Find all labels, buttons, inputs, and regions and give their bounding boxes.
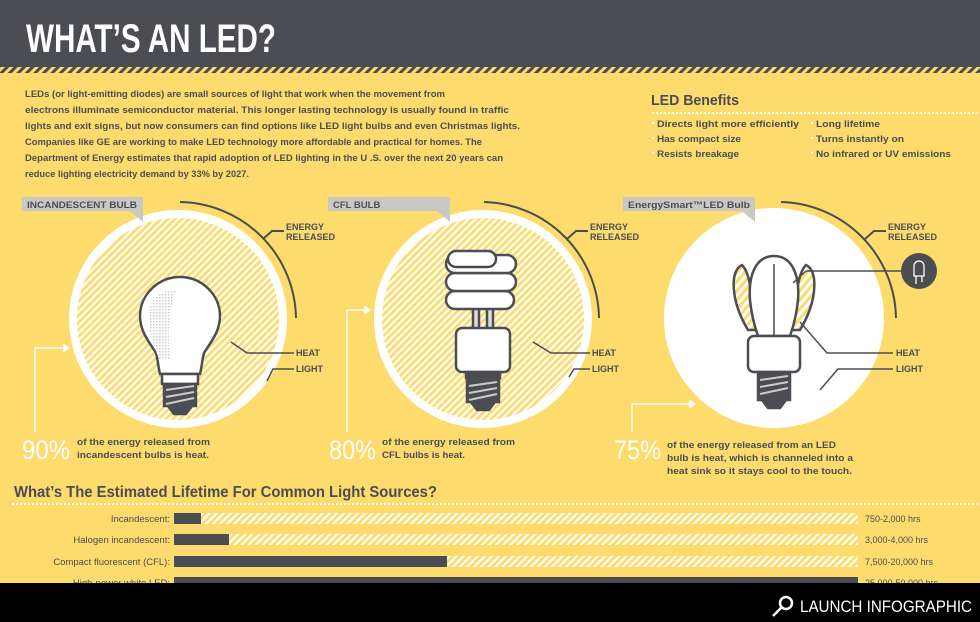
stat 90%: 90% xyxy=(22,435,70,465)
intro text: reduce lighting electricity demand by 33% by 2027. xyxy=(25,169,249,179)
panel: LED: EnergySmart™LED Bulb xyxy=(628,200,750,211)
bar chart: lifetimes: 3,000-4,000 hrs xyxy=(865,535,929,545)
panel: LED benefits: Has compact size xyxy=(657,134,741,144)
panel: CFL: CFL bulbs is heat. xyxy=(382,450,465,460)
bar chart: lifetimes: What’s The Estimated Lifetime For Common Light Sources? xyxy=(14,484,437,501)
icon: LED diode xyxy=(901,253,937,289)
intro text: LEDs (or light-emitting diodes) are small sources of light that work when the movement from xyxy=(25,89,445,99)
bar chart: lifetimes: 25,000-50,000 hrs xyxy=(865,578,939,588)
panel: LED benefits: Turns instantly on xyxy=(816,134,904,144)
panel: LED: RELEASED xyxy=(888,232,938,242)
panel: LED benefits: No infrared or UV emissions xyxy=(816,149,951,159)
label tag: INCANDESCENT BULB xyxy=(27,200,137,211)
panel: LED: bulb is heat, which is channeled into a xyxy=(667,453,854,463)
panel: CFL xyxy=(328,197,640,465)
panel: CFL: of the energy released from xyxy=(382,437,515,447)
bar chart: lifetimes xyxy=(12,484,980,589)
panel: CFL: HEAT xyxy=(592,348,616,358)
panel: LED xyxy=(614,197,938,476)
panel: LED: ENERGY xyxy=(888,222,926,232)
panel: incandescent: ENERGY xyxy=(286,222,324,232)
icon: magnifier xyxy=(773,597,792,616)
bar chart: lifetimes: Incandescent: xyxy=(111,514,170,525)
panel: CFL: 80% xyxy=(329,435,376,465)
icon: CFL bulb xyxy=(446,251,516,410)
intro text: lights and exit signs, but now consumers can find options like LED light bulbs and even Christmas lights. xyxy=(25,121,520,131)
panel: incandescent xyxy=(22,197,336,465)
bar chart: lifetimes: Compact fluorescent (CFL): xyxy=(53,557,170,568)
stat 90%: incandescent bulbs is heat. xyxy=(77,450,209,460)
panel: LED: LIGHT xyxy=(896,364,923,374)
stat 90%: of the energy released from xyxy=(77,437,210,447)
panel: CFL: LIGHT xyxy=(592,364,619,374)
panel: CFL: CFL BULB xyxy=(333,200,380,211)
panel: incandescent: RELEASED xyxy=(286,232,336,242)
panel: incandescent: LIGHT xyxy=(296,364,323,374)
bar chart: lifetimes: Halogen incandescent: xyxy=(73,535,170,546)
panel: LED benefits xyxy=(651,92,980,159)
panel: LED benefits: LED Benefits xyxy=(651,92,739,109)
footer bar xyxy=(0,583,980,622)
panel: LED benefits: Resists breakage xyxy=(657,149,739,159)
icon: LED bulb xyxy=(734,256,814,408)
header bar xyxy=(0,0,980,73)
bar chart: lifetimes: 7,500-20,000 hrs xyxy=(865,557,934,567)
stat 90% xyxy=(22,435,210,465)
panel: LED benefits: Directs light more efficiently xyxy=(657,119,799,129)
panel: LED: of the energy released from an LED xyxy=(667,440,836,450)
icon: incandescent bulb xyxy=(140,277,220,414)
intro text: Department of Energy estimates that rapid adoption of LED lighting in the U .S. over the next 20 years can xyxy=(25,153,503,163)
bar chart: lifetimes: 750-2,000 hrs xyxy=(865,514,921,524)
panel: LED benefits: Long lifetime xyxy=(816,119,880,129)
arrow xyxy=(35,345,69,432)
intro text xyxy=(25,89,520,179)
intro text: electrons illuminate semiconductor material. This longer lasting technology is usually found in traffic xyxy=(25,105,509,115)
panel: CFL: ENERGY xyxy=(590,222,628,232)
panel: CFL: RELEASED xyxy=(590,232,640,242)
panel: LED: heat sink so it stays cool to the touch. xyxy=(667,466,852,476)
title: WHAT’S AN LED? xyxy=(26,17,276,61)
panel: incandescent: HEAT xyxy=(296,348,320,358)
panel: LED: HEAT xyxy=(896,348,920,358)
intro text: Companies like GE are working to make LED technology more affordable and practical for homes. The xyxy=(25,137,482,147)
panel: LED: 75% xyxy=(614,435,661,465)
label tag xyxy=(22,197,143,222)
bar chart: lifetimes: High-power white LED: xyxy=(73,578,170,589)
